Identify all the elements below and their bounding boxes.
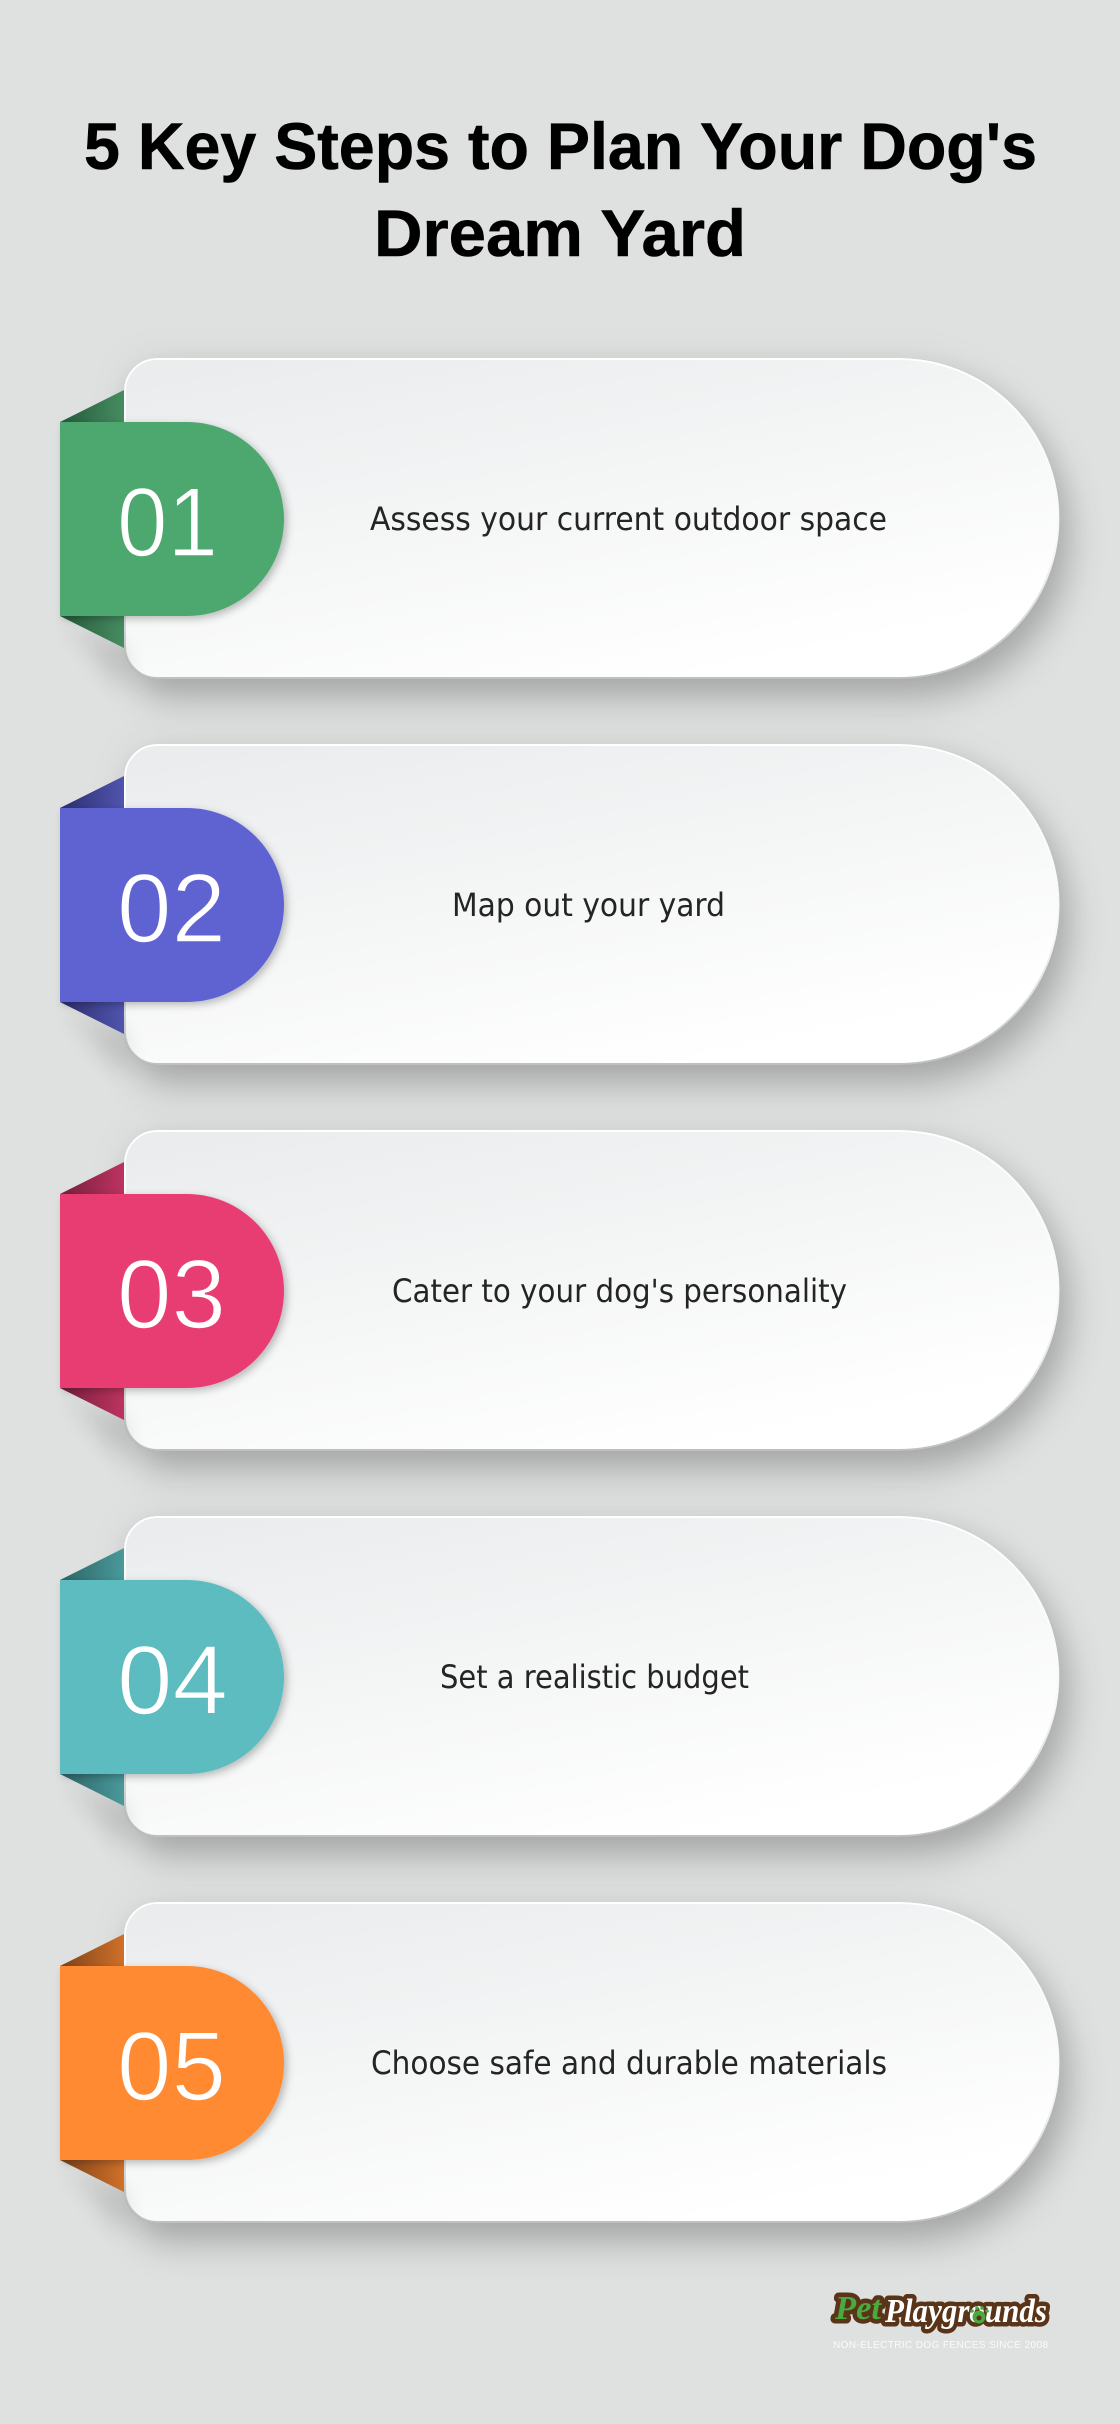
step text: Assess your current outdoor space [370,500,887,538]
step number: 03 [117,1239,226,1349]
step 3: dog personality [60,1131,1058,1462]
step 2: map yard [60,745,1058,1076]
logo tagline: NON-ELECTRIC DOG FENCES SINCE 2008 [833,2340,1048,2351]
step text: Choose safe and durable materials [371,2044,887,2082]
number badge [60,808,284,1002]
card panel [125,745,1058,1064]
fold shadow [66,620,124,690]
fold shadow [66,1006,124,1076]
ribbon folds [60,776,124,1034]
logo wordmark: Pet [834,2290,883,2327]
logo wordmark: Playgrounds [884,2293,1047,2330]
step number: 04 [117,1625,228,1735]
fold shadow [66,1392,124,1462]
step text: Set a realistic budget [440,1658,749,1696]
logo wordmark [834,2290,1047,2330]
number badge [60,1194,284,1388]
ribbon folds [60,1548,124,1806]
step text: Map out your yard [452,886,725,924]
card panel [125,1903,1058,2222]
card panel [125,1131,1058,1450]
number badge [60,1966,284,2160]
card panel [125,1517,1058,1836]
step 1: assess outdoor space [60,359,1058,690]
step text: Cater to your dog's personality [392,1272,847,1310]
number badge [60,422,284,616]
step 5: materials [60,1903,1058,2234]
step 4: budget [60,1517,1058,1848]
title [84,109,1037,270]
ribbon folds [60,390,124,648]
fold shadow [66,1778,124,1848]
number badge [60,1580,284,1774]
ribbon folds [60,1162,124,1420]
title: 5 Key Steps to Plan Your Dog's [84,109,1037,183]
title: Dream Yard [374,196,746,270]
step number: 01 [117,467,218,577]
icon: paw in logo [970,2306,989,2324]
step number: 05 [117,2011,226,2121]
step number: 02 [117,853,226,963]
fold shadow [66,2164,124,2234]
ribbon folds [60,1934,124,2192]
logo: Pet Playgrounds [833,2290,1048,2351]
card panel [125,359,1058,678]
